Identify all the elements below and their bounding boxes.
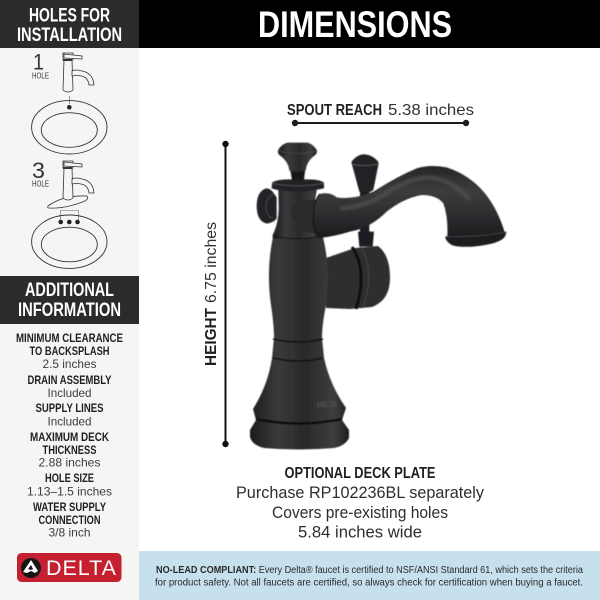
- text: optional deck plate: Covers pre-existing holes: [272, 504, 448, 522]
- text: optional deck plate: OPTIONAL DECK PLATE: [284, 465, 436, 482]
- icon: 3 hole faucet with deck plate and sink: [32, 158, 107, 268]
- callout: no-lead compliant: [139, 551, 600, 600]
- rear lever handle: [351, 154, 379, 247]
- text: additional information list: 2.5 inches: [42, 357, 96, 371]
- base logo mark: DELTA: [317, 402, 337, 409]
- side valve cylinder: [326, 246, 390, 309]
- heading: holes for installation: [0, 0, 139, 48]
- text: optional deck plate: 5.84 inches wide: [298, 524, 422, 542]
- title band: dimensions: [139, 0, 600, 48]
- icon: 3 hole faucet with deck plate and sink: 3: [32, 158, 45, 183]
- text: additional information list: TO BACKSPLASH: [30, 346, 110, 358]
- dimension: spout reach: 5.38 inches: [388, 102, 474, 119]
- dimension: height: 6.75 inches: [203, 222, 220, 303]
- text: additional information list: Included: [48, 386, 92, 400]
- text: additional information list: DRAIN ASSEMBLY: [28, 375, 112, 387]
- heading: additional information: ADDITIONAL: [25, 279, 114, 301]
- text: additional information list: 2.88 inches: [38, 456, 100, 470]
- icon: 3 hole faucet with deck plate and sink: HOLE: [32, 180, 49, 188]
- text: additional information list: WATER SUPPLY: [33, 502, 106, 514]
- icon: 1 hole faucet and sink: HOLE: [32, 72, 49, 80]
- logo: Delta: DELTA: [46, 556, 117, 580]
- heading: holes for installation: HOLES FOR: [29, 4, 110, 26]
- dimension: spout reach: [287, 102, 474, 126]
- heading: holes for installation: INSTALLATION: [17, 24, 122, 46]
- heading: additional information: INFORMATION: [18, 299, 121, 321]
- upper body, left handle, knob: [257, 143, 324, 239]
- text: optional deck plate: [236, 465, 485, 542]
- text: additional information list: Included: [48, 414, 92, 428]
- image: matte black faucet: [250, 143, 507, 450]
- dimension: height: [203, 141, 229, 447]
- text: additional information list: MAXIMUM DECK: [30, 432, 110, 444]
- text: optional deck plate: Purchase RP102236BL separately: [236, 484, 485, 502]
- panel: left sidebar: [0, 0, 139, 600]
- icon: 1 hole faucet and sink: [32, 50, 107, 154]
- spout: [292, 166, 507, 247]
- icon: 1 hole faucet and sink: 1: [33, 50, 44, 74]
- lower body silhouette: [250, 237, 349, 450]
- logo: Delta: [17, 553, 122, 582]
- title band: dimensions: DIMENSIONS: [258, 3, 452, 45]
- base groove: [256, 419, 342, 424]
- dimension: height: HEIGHT: [203, 308, 220, 366]
- collar rings: [273, 339, 323, 361]
- text: additional information list: SUPPLY LINES: [36, 403, 104, 415]
- text: additional information list: [16, 333, 123, 540]
- text: additional information list: THICKNESS: [42, 445, 97, 457]
- text: additional information list: HOLE SIZE: [45, 473, 94, 485]
- text: additional information list: CONNECTION: [38, 515, 100, 527]
- dimension: spout reach: SPOUT REACH: [287, 102, 382, 119]
- heading: additional information: [0, 276, 139, 324]
- text: additional information list: 3/8 inch: [48, 526, 90, 540]
- callout: no-lead compliant: for product safety. Not all faucets are certified, so always check for certification when buying a faucet.: [155, 578, 583, 588]
- text: additional information list: 1.13–1.5 inches: [27, 484, 112, 498]
- text: additional information list: MINIMUM CLEARANCE: [16, 333, 123, 345]
